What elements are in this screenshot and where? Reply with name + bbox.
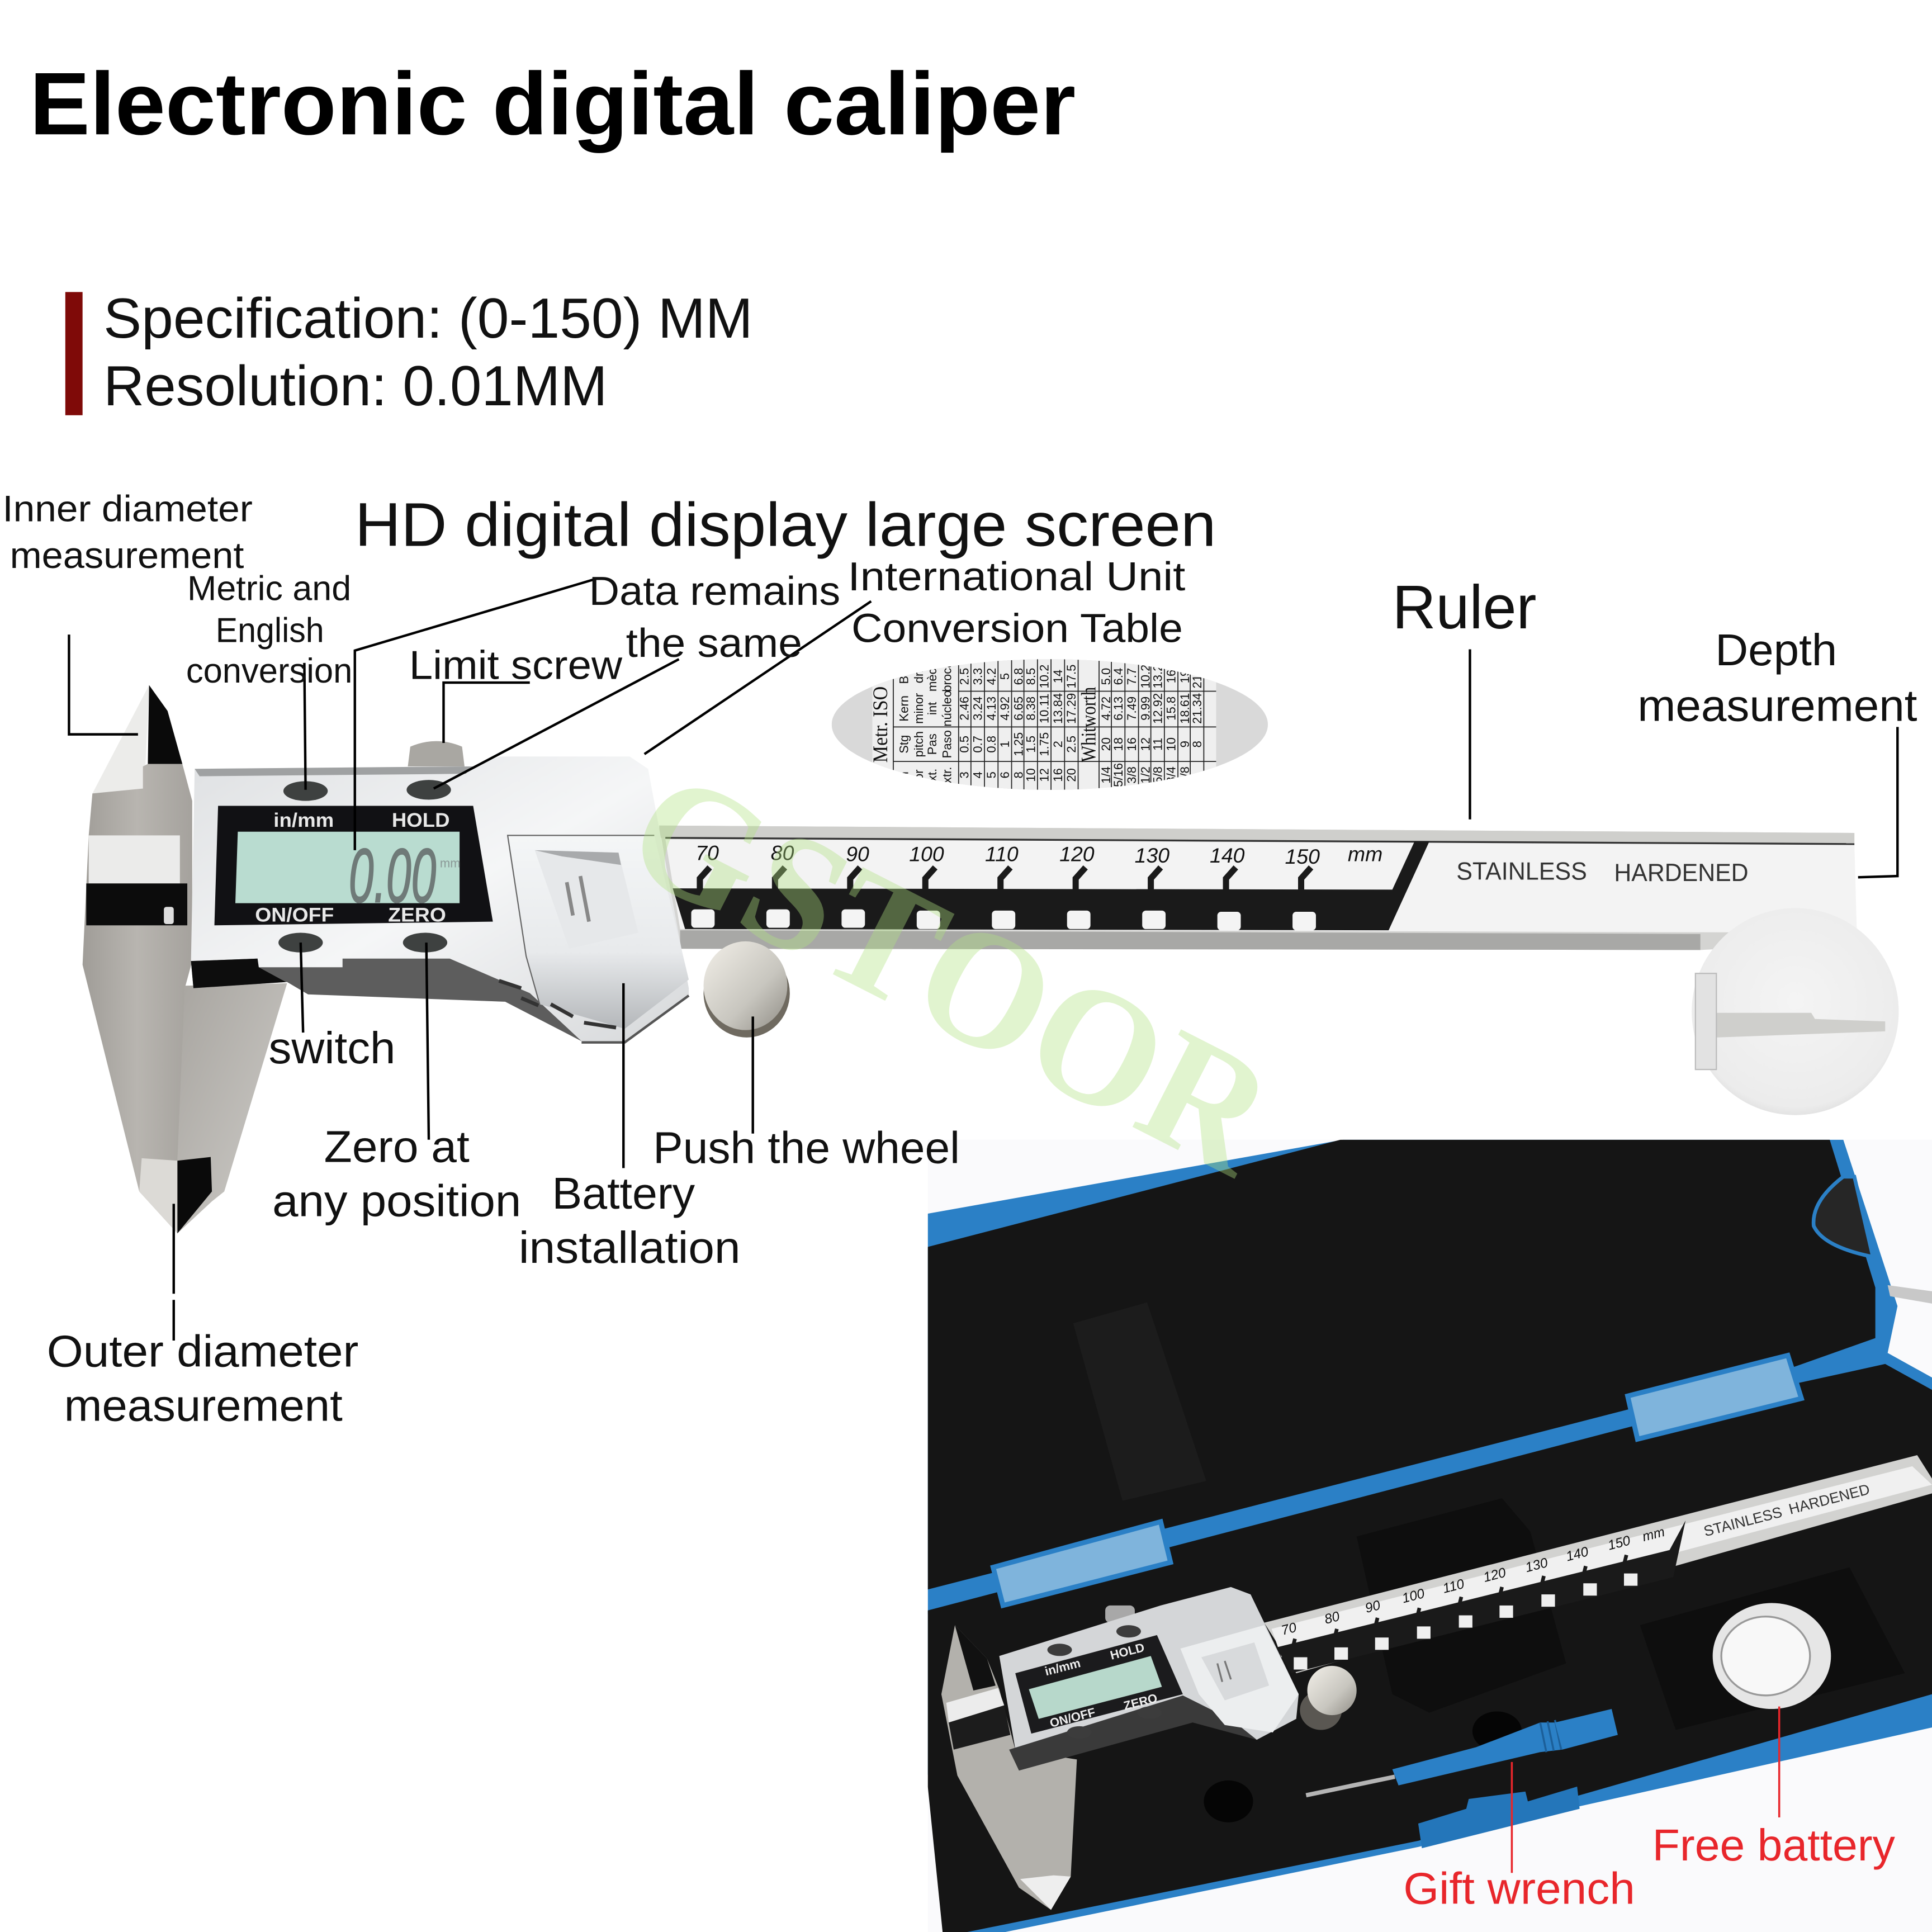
battery foam cutout — [1640, 1568, 1905, 1730]
table text columns: 6 — [998, 771, 1012, 779]
lower jaw tip white — [139, 1158, 177, 1233]
central foam cutout — [1357, 1498, 1566, 1713]
label: inner diameter: measurement — [10, 535, 244, 576]
heading: hd display: HD digital display large screen — [355, 490, 1216, 559]
body black shadow — [191, 959, 286, 988]
table text columns: Pas — [925, 733, 939, 755]
specification line: Specification: (0-150) MM — [103, 287, 753, 350]
table text columns: 0.8 — [984, 736, 998, 753]
table text columns: Paso — [940, 730, 954, 758]
label: outer diameter: Outer diameter — [47, 1326, 358, 1376]
conversion table — [832, 659, 1269, 791]
hardened text: HARDENED — [1614, 859, 1749, 887]
lcd unit: mm — [440, 856, 461, 870]
label: limit screw: Limit screw — [409, 642, 623, 688]
scale numbers: 70 — [695, 841, 719, 864]
mini lcd screen — [1029, 1656, 1162, 1719]
scale numbers: 120 — [1059, 842, 1095, 866]
mini button labels: in/mm — [1043, 1656, 1082, 1678]
rod groove — [1696, 973, 1716, 1069]
table text columns: 1 — [998, 741, 1012, 747]
mini button labels: HOLD — [1109, 1640, 1146, 1663]
table text columns: 13.84 — [1051, 693, 1065, 724]
battery leader — [623, 983, 624, 1168]
table text columns: 6.4 — [1111, 668, 1125, 685]
inner diameter leader — [69, 634, 138, 735]
label: outer diameter — [47, 1326, 358, 1430]
photo backdrop — [928, 1140, 1932, 1932]
screwdriver shaft — [1306, 1777, 1395, 1795]
jaw gray body — [83, 764, 192, 1233]
table text columns: 8 — [1011, 771, 1025, 779]
table text columns: 10 — [1164, 737, 1178, 751]
mini scale numbers: 120 — [1482, 1565, 1508, 1585]
cover edge — [508, 835, 654, 1004]
table text columns: 3 — [957, 771, 971, 779]
free battery label: Free battery — [1652, 1820, 1895, 1870]
mini hardened text: HARDENED — [1787, 1481, 1872, 1518]
mini lcd — [1015, 1635, 1183, 1734]
label: battery installation — [519, 1168, 741, 1272]
table text columns: 6.65 — [1011, 697, 1025, 721]
lcd screen — [235, 832, 460, 903]
scale numbers: 130 — [1135, 844, 1169, 867]
table text columns: 18 — [1111, 737, 1125, 751]
wheel — [704, 941, 790, 1038]
zero label: ZERO — [388, 905, 446, 926]
table text columns: 10 — [1024, 768, 1038, 782]
mini jaw white band — [946, 1688, 1004, 1722]
scale numbers: 80 — [771, 841, 794, 864]
conversion table leader — [645, 602, 871, 754]
table text columns: 17.29 — [1064, 693, 1078, 724]
stainless text: STAINLESS — [1456, 858, 1587, 886]
label: battery installation: Battery — [552, 1168, 695, 1218]
battery — [1713, 1603, 1831, 1709]
table text columns: 20 — [1064, 768, 1078, 782]
table text columns: 9 — [1178, 741, 1192, 747]
table text columns: 21.5 — [1190, 665, 1204, 688]
label: zero at any position: Zero at — [324, 1121, 470, 1171]
body grip ridges — [499, 981, 616, 1027]
table text columns: 7.49 — [1125, 697, 1139, 721]
title: Electronic digital caliper — [30, 54, 1076, 153]
table text columns: xtr. — [940, 767, 954, 783]
label: zero at any position: any position — [272, 1176, 521, 1225]
label: data remains: the same — [626, 621, 802, 666]
mini scale numbers: 150 — [1606, 1533, 1632, 1554]
mini jaw dark band — [949, 1705, 1010, 1750]
scale numbers: 90 — [846, 842, 869, 866]
resolution line: Resolution: 0.01MM — [103, 354, 608, 418]
body lower shade — [191, 959, 581, 1041]
depth rod — [1716, 1013, 1885, 1038]
lid latch — [1813, 1177, 1873, 1257]
table text columns: 10.2 — [1138, 665, 1152, 688]
mini scale numbers: mm — [1641, 1524, 1666, 1545]
table text columns: dri — [912, 670, 926, 683]
mini button labels: ON/OFF — [1048, 1705, 1097, 1730]
ruler scale face — [665, 839, 1857, 932]
ruler black band — [673, 841, 1429, 930]
gray surface at right edge — [1888, 1285, 1932, 1304]
lcd reading: 0.00 — [349, 832, 436, 918]
table text columns: 5/8 — [1150, 766, 1164, 784]
label: conversion table: Conversion Table — [851, 605, 1183, 651]
mini button labels — [1043, 1640, 1159, 1730]
label: switch: switch — [268, 1023, 396, 1073]
thumb screw — [408, 741, 465, 766]
wheel leader — [752, 1016, 754, 1134]
table text columns: 1/4 — [1099, 766, 1113, 784]
table text columns: 3/8 — [1125, 766, 1139, 784]
battery cover — [508, 835, 689, 1029]
table text columns: 15.8 — [1164, 697, 1178, 721]
mini scale numbers: 140 — [1564, 1544, 1590, 1564]
scale numbers: 110 — [985, 842, 1019, 866]
mini buttons — [1047, 1625, 1162, 1739]
body bottom edge — [581, 996, 689, 1043]
table text columns: 10.11 — [1038, 694, 1052, 723]
gift wrench label: Gift wrench — [1403, 1863, 1635, 1913]
label: metric and english — [186, 569, 352, 690]
ruler dark edge line — [665, 838, 1854, 844]
table text columns: 14 — [1051, 670, 1065, 683]
table text columns: 4.13 — [984, 697, 998, 721]
table text columns: int — [925, 702, 939, 715]
table text columns: 13.2 — [1150, 665, 1164, 688]
table text columns: 2.5 — [1064, 736, 1078, 753]
data remains leader — [355, 579, 595, 850]
caliper body — [191, 756, 689, 1043]
label: metric and english: conversion — [186, 652, 352, 690]
table text columns: 8.5 — [1024, 668, 1038, 685]
table text columns: or — [912, 770, 926, 780]
ruler lower steel strip — [680, 930, 1701, 950]
mini button labels: ZERO — [1122, 1691, 1159, 1713]
table text columns: 1.75 — [1038, 732, 1052, 756]
mini scale numbers — [1280, 1524, 1666, 1639]
table text columns: 8.38 — [1024, 697, 1038, 721]
table text columns: 7/8 — [1178, 766, 1192, 784]
table text columns: 2.46 — [957, 697, 971, 721]
mini stainless text: STAINLESS — [1702, 1504, 1784, 1540]
table text columns: 20 — [1099, 737, 1113, 751]
table text columns: 9.99 — [1138, 697, 1152, 721]
mini scale face — [1272, 1466, 1932, 1657]
table text columns: 1.5 — [1024, 736, 1038, 753]
table text columns: 0.5 — [957, 736, 971, 753]
label: metric and english: English — [216, 611, 324, 650]
screwdriver end block — [1555, 1709, 1618, 1750]
table text columns: 18.61 — [1178, 693, 1192, 724]
mini black band — [1276, 1521, 1685, 1673]
in/mm label: in/mm — [273, 809, 334, 831]
table text columns: xt. — [925, 769, 939, 782]
ruler top steel strip — [659, 826, 1854, 843]
label: inner diameter — [2, 488, 253, 576]
scale numbers: 100 — [909, 842, 944, 866]
mini scale numbers: 70 — [1280, 1620, 1299, 1639]
scale numbers: 150 — [1285, 845, 1320, 868]
table text columns: broca — [940, 661, 954, 692]
lower jaw tip black — [177, 1157, 212, 1233]
beam white band — [89, 835, 180, 883]
scale numbers: mm — [1348, 842, 1382, 866]
table text columns: Bo — [897, 669, 911, 684]
lcd bezel — [215, 806, 493, 925]
screwdriver ribs — [1540, 1720, 1561, 1752]
table panel — [872, 659, 1216, 791]
mini jaws — [941, 1625, 1077, 1910]
free battery leader — [1779, 1707, 1780, 1817]
limit screw leader — [443, 683, 530, 743]
mini scale ticks — [1292, 1555, 1626, 1649]
cover grip lines — [567, 876, 589, 922]
table text columns: 16 — [1164, 670, 1178, 683]
table text columns: minor — [912, 693, 926, 724]
table text columns: 3.3 — [971, 668, 985, 685]
foam finger hole — [1204, 1781, 1253, 1822]
table text columns: mèch — [925, 661, 939, 692]
case base blue frame — [928, 1353, 1932, 1932]
mini wheel base — [1300, 1690, 1342, 1730]
table text columns: 7.7 — [1125, 668, 1139, 685]
screwdriver — [1306, 1709, 1618, 1795]
table text columns: 4.72 — [1099, 697, 1113, 721]
mini caliper — [941, 1455, 1932, 1910]
mini battery cover — [1181, 1625, 1299, 1732]
label: conversion table: International Unit — [847, 554, 1185, 599]
mini cover recess — [1201, 1642, 1269, 1701]
wheel knurl — [704, 949, 790, 1038]
table text columns: 16 — [1125, 737, 1139, 751]
table text columns: 6.13 — [1111, 697, 1125, 721]
specification block — [65, 287, 753, 418]
table text columns: pitch — [912, 731, 926, 757]
table text columns: 1 — [1190, 771, 1204, 779]
depth measurement detail circle — [1692, 908, 1898, 1115]
table text columns: n — [897, 771, 911, 779]
table text columns: 5 — [984, 771, 998, 779]
label: ruler: Ruler — [1393, 573, 1536, 642]
table text columns: 3.24 — [971, 697, 985, 721]
base foam — [928, 1364, 1932, 1932]
beam black band — [86, 883, 187, 925]
label: data remains: Data remains — [589, 569, 840, 614]
scale numbers: 140 — [1210, 844, 1245, 867]
table text columns: 17.5 — [1064, 665, 1078, 688]
table text columns: 3/4 — [1164, 766, 1178, 784]
mini wheel — [1300, 1666, 1357, 1730]
label: depth measurement — [1637, 625, 1917, 730]
lid foam — [928, 1140, 1876, 1589]
table text columns: 8 — [1190, 741, 1204, 747]
table text columns: 12 — [1038, 768, 1052, 782]
table text columns — [869, 661, 1204, 787]
table text columns: 4 — [971, 771, 985, 779]
case lid blue frame — [928, 1140, 1897, 1614]
label: outer diameter: measurement — [64, 1380, 343, 1430]
battery top — [1721, 1617, 1810, 1696]
table text columns: 6.8 — [1011, 668, 1025, 685]
table background — [832, 659, 1269, 791]
table text columns: 11 — [1150, 738, 1164, 751]
mini scale numbers: 110 — [1441, 1576, 1466, 1597]
table text columns: Metr. ISO — [869, 686, 892, 763]
on/off label: ON/OFF — [255, 905, 334, 926]
table text columns: 1/2 — [1138, 766, 1152, 784]
label: conversion table — [847, 554, 1185, 651]
switch leader — [301, 943, 303, 1033]
mini scale squares — [1294, 1574, 1637, 1670]
mini body lower shadow — [1009, 1696, 1257, 1770]
zero leader — [427, 943, 429, 1140]
table text columns: 2.5 — [957, 668, 971, 685]
hold label: HOLD — [392, 809, 449, 831]
table text columns: 10.2 — [1038, 665, 1052, 688]
label: depth measurement: Depth — [1715, 625, 1837, 675]
table text columns: 5.0 — [1099, 668, 1113, 685]
photo: caliper in blue case — [928, 1140, 1932, 1932]
main caliper — [83, 685, 1857, 1233]
table text columns: 19 — [1178, 670, 1192, 683]
watermark: GSTOOR — [602, 733, 1302, 1211]
gift wrench leader — [1511, 1762, 1512, 1873]
table text columns: 16 — [1051, 768, 1065, 782]
depth leader — [1858, 727, 1897, 877]
mini jaw tip — [1020, 1876, 1071, 1910]
table text columns: 12 — [1138, 737, 1152, 751]
table text columns: 5/16 — [1111, 763, 1125, 787]
label: data remains — [589, 569, 840, 666]
hold leader — [434, 659, 679, 789]
table text columns: Kern — [897, 695, 911, 722]
body top rim — [195, 766, 473, 776]
cover recess top shade — [535, 850, 621, 865]
table text columns: 4.2 — [984, 668, 998, 685]
red accent bar — [65, 292, 83, 415]
mini jaw upper black — [955, 1625, 996, 1690]
leader lines — [69, 579, 1897, 1341]
foam hole under screwdriver — [1472, 1712, 1522, 1745]
right hinge — [1628, 1355, 1801, 1439]
label: depth measurement: measurement — [1637, 680, 1917, 730]
left hinge — [993, 1522, 1171, 1606]
outer diameter leader — [173, 1204, 174, 1341]
ruler leader — [1469, 650, 1470, 820]
cover recess — [535, 850, 638, 949]
upper jaw black face — [148, 685, 182, 764]
beam small square — [164, 907, 174, 924]
wheel cap — [704, 941, 787, 1030]
table text columns: 12.92 — [1150, 693, 1164, 724]
scale squares — [691, 910, 1316, 930]
mini scale numbers: 130 — [1524, 1555, 1550, 1575]
mini scale numbers: 100 — [1400, 1586, 1427, 1606]
mini wheel cap — [1308, 1666, 1357, 1715]
case clasp — [1418, 1787, 1580, 1848]
table text columns: 5 — [998, 673, 1012, 680]
ruler beam — [659, 826, 1854, 950]
mini body — [1000, 1587, 1299, 1770]
table text columns: 21.34 — [1190, 693, 1204, 724]
scale numbers — [695, 841, 1382, 868]
label: zero at any position — [272, 1121, 521, 1225]
screwdriver handle — [1393, 1722, 1562, 1786]
label: inner diameter: Inner diameter — [2, 488, 253, 529]
table text columns: Whitworth — [1077, 687, 1100, 762]
foam pad — [1073, 1303, 1206, 1501]
mini thumb screw — [1105, 1606, 1135, 1623]
table text columns: 4.92 — [998, 697, 1012, 721]
label: push the wheel: Push the wheel — [653, 1123, 960, 1173]
table text columns: 1.25 — [1011, 732, 1025, 756]
battery outer ring — [1713, 1603, 1831, 1709]
mini beam — [1264, 1455, 1932, 1673]
in/mm leader — [304, 663, 306, 790]
label: battery installation: installation — [519, 1223, 741, 1272]
mini cover lines — [1218, 1661, 1231, 1682]
table text columns: Stg — [897, 735, 911, 754]
table text columns: 2 — [1051, 741, 1065, 747]
mini scale numbers: 90 — [1363, 1598, 1382, 1616]
circle disc — [1692, 908, 1898, 1115]
table text columns: 0.7 — [971, 736, 985, 753]
mini scale numbers: 80 — [1323, 1609, 1342, 1627]
table text columns: núcleo — [940, 690, 954, 727]
label: metric and english: Metric and — [187, 569, 351, 608]
upper jaw white tip — [92, 685, 149, 801]
table grid — [893, 659, 1216, 791]
buttons — [278, 780, 451, 953]
lower jaw right blade — [177, 983, 287, 1233]
scale ticks — [700, 868, 1311, 889]
